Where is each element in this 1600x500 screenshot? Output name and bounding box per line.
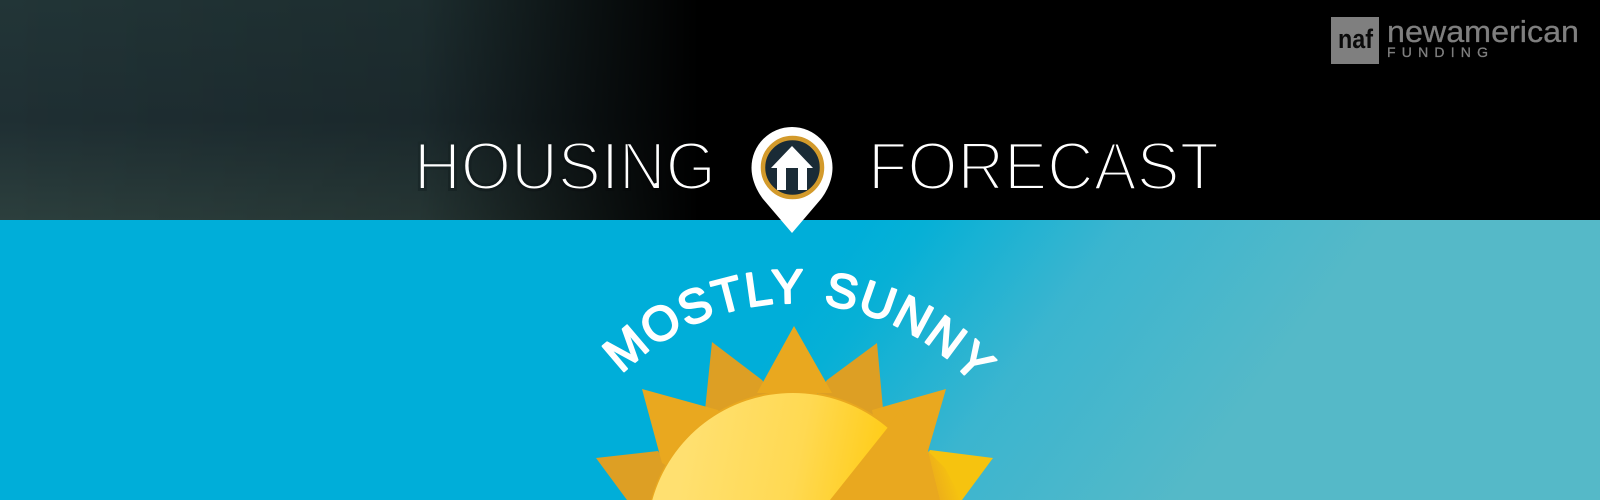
title: housing: HOUSING — [414, 128, 716, 204]
logo: New American Funding: newamerican — [1387, 14, 1579, 49]
arched text: mostly sunny: MOSTLY SUNNY — [602, 268, 998, 376]
sky background — [0, 220, 1600, 500]
logo: New American Funding: FUNDING — [1387, 44, 1488, 60]
sun ray: right lit — [900, 450, 993, 500]
sun rays: front orange — [642, 326, 946, 500]
sun ray soft shadow — [928, 451, 962, 500]
cloud-like shadow wedge over sun — [830, 410, 940, 500]
sun disc — [651, 391, 935, 500]
logo: New American Funding: naf — [1338, 24, 1374, 54]
icon: sun — [596, 326, 993, 500]
sun rays: back dark — [596, 342, 884, 500]
icon: house map pin — [752, 127, 832, 233]
title — [414, 128, 1219, 204]
title: forecast: FORECAST — [868, 128, 1219, 204]
dark header band — [0, 0, 652, 220]
logo: New American Funding — [1331, 14, 1579, 64]
